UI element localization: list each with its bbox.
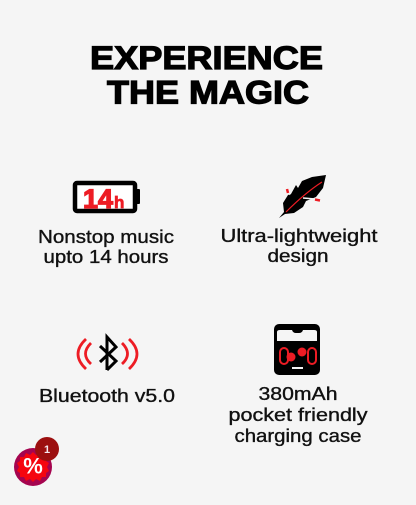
text: 380mAh case: charging case [234,426,362,446]
text: 380mAh case: 380mAh [258,384,338,404]
icon: discount badge [14,437,59,486]
notification count: 1 [44,444,50,456]
icon: battery 14h: h [114,193,124,212]
text: nonstop music: Nonstop music [38,227,174,247]
title: EXPERIENCE [90,40,323,76]
icon: bluetooth waves [78,337,137,370]
text: ultra-lightweight: design [268,246,328,266]
text: ultra-lightweight: Ultra-lightweight [220,226,378,246]
icon: battery 14h [75,183,140,214]
icon: feather [279,175,326,218]
text: 380mAh case [228,384,368,446]
title [90,40,323,110]
title: THE MAGIC [107,74,309,110]
icon: battery 14h: 14 [83,184,113,214]
text: nonstop music [38,227,174,267]
text: nonstop music: upto 14 hours [44,247,168,267]
icon: discount badge: % [23,454,43,478]
text: 380mAh case: pocket friendly [228,405,368,425]
text: bluetooth: Bluetooth v5.0 [39,386,175,406]
icon: charging case [274,324,320,375]
text: ultra-lightweight [220,226,378,266]
